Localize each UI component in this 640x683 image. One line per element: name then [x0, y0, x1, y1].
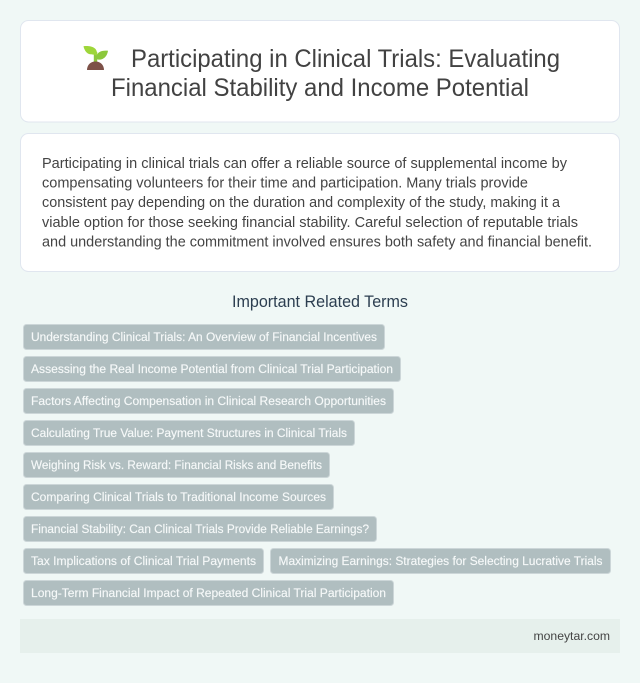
- tag 7: [24, 516, 376, 542]
- summary text: consistent pay depending on the duration and complexity of the study, making it a: [42, 195, 560, 211]
- tag 1: [24, 324, 384, 350]
- tag 3: [24, 388, 394, 414]
- tag 7: Financial Stability: Can Clinical Trials Provide Reliable Earnings?: [31, 522, 369, 536]
- icon: seedling: [84, 46, 108, 70]
- tag 8: Tax Implications of Clinical Trial Payments: [31, 554, 256, 568]
- panel: related term tags: [24, 324, 610, 606]
- tag 5: Weighing Risk vs. Reward: Financial Risks and Benefits: [31, 458, 322, 472]
- tag 6: [24, 484, 334, 510]
- summary text: viable option for those seeking financial stability. Careful selection of reputable trials: [42, 215, 578, 231]
- tag 9: Maximizing Earnings: Strategies for Selecting Lucrative Trials: [278, 554, 602, 568]
- tag 2: [24, 356, 400, 382]
- tag 6: Comparing Clinical Trials to Traditional Income Sources: [31, 490, 326, 504]
- title: Participating in Clinical Trials: Evaluating: [131, 46, 560, 73]
- tag 8: [24, 548, 264, 574]
- summary text: Participating in clinical trials can offer a reliable source of supplemental income by: [42, 156, 568, 172]
- panel: title card: [20, 20, 620, 122]
- tag 5: [24, 452, 330, 478]
- summary text: [42, 156, 592, 250]
- footer: [20, 619, 620, 653]
- footer: moneytar.com: [534, 629, 610, 643]
- tag 3: Factors Affecting Compensation in Clinical Research Opportunities: [31, 394, 386, 408]
- tag 4: Calculating True Value: Payment Structures in Clinical Trials: [31, 426, 347, 440]
- heading: related terms: Important Related Terms: [232, 293, 408, 311]
- tag 2: Assessing the Real Income Potential from Clinical Trial Participation: [31, 362, 393, 376]
- tag 10: [24, 580, 394, 606]
- title: Financial Stability and Income Potential: [111, 75, 529, 102]
- tag 1: Understanding Clinical Trials: An Overview of Financial Incentives: [31, 330, 377, 344]
- summary text: and understanding the commitment involved ensures both safety and financial benefit.: [42, 234, 592, 250]
- title: [111, 46, 560, 102]
- tag 10: Long-Term Financial Impact of Repeated Clinical Trial Participation: [31, 586, 386, 600]
- summary text: compensating volunteers for their time and participation. Many trials provide: [42, 176, 528, 192]
- tag 4: [24, 420, 354, 446]
- tag 9: [270, 548, 610, 574]
- panel: summary card: [20, 134, 620, 272]
